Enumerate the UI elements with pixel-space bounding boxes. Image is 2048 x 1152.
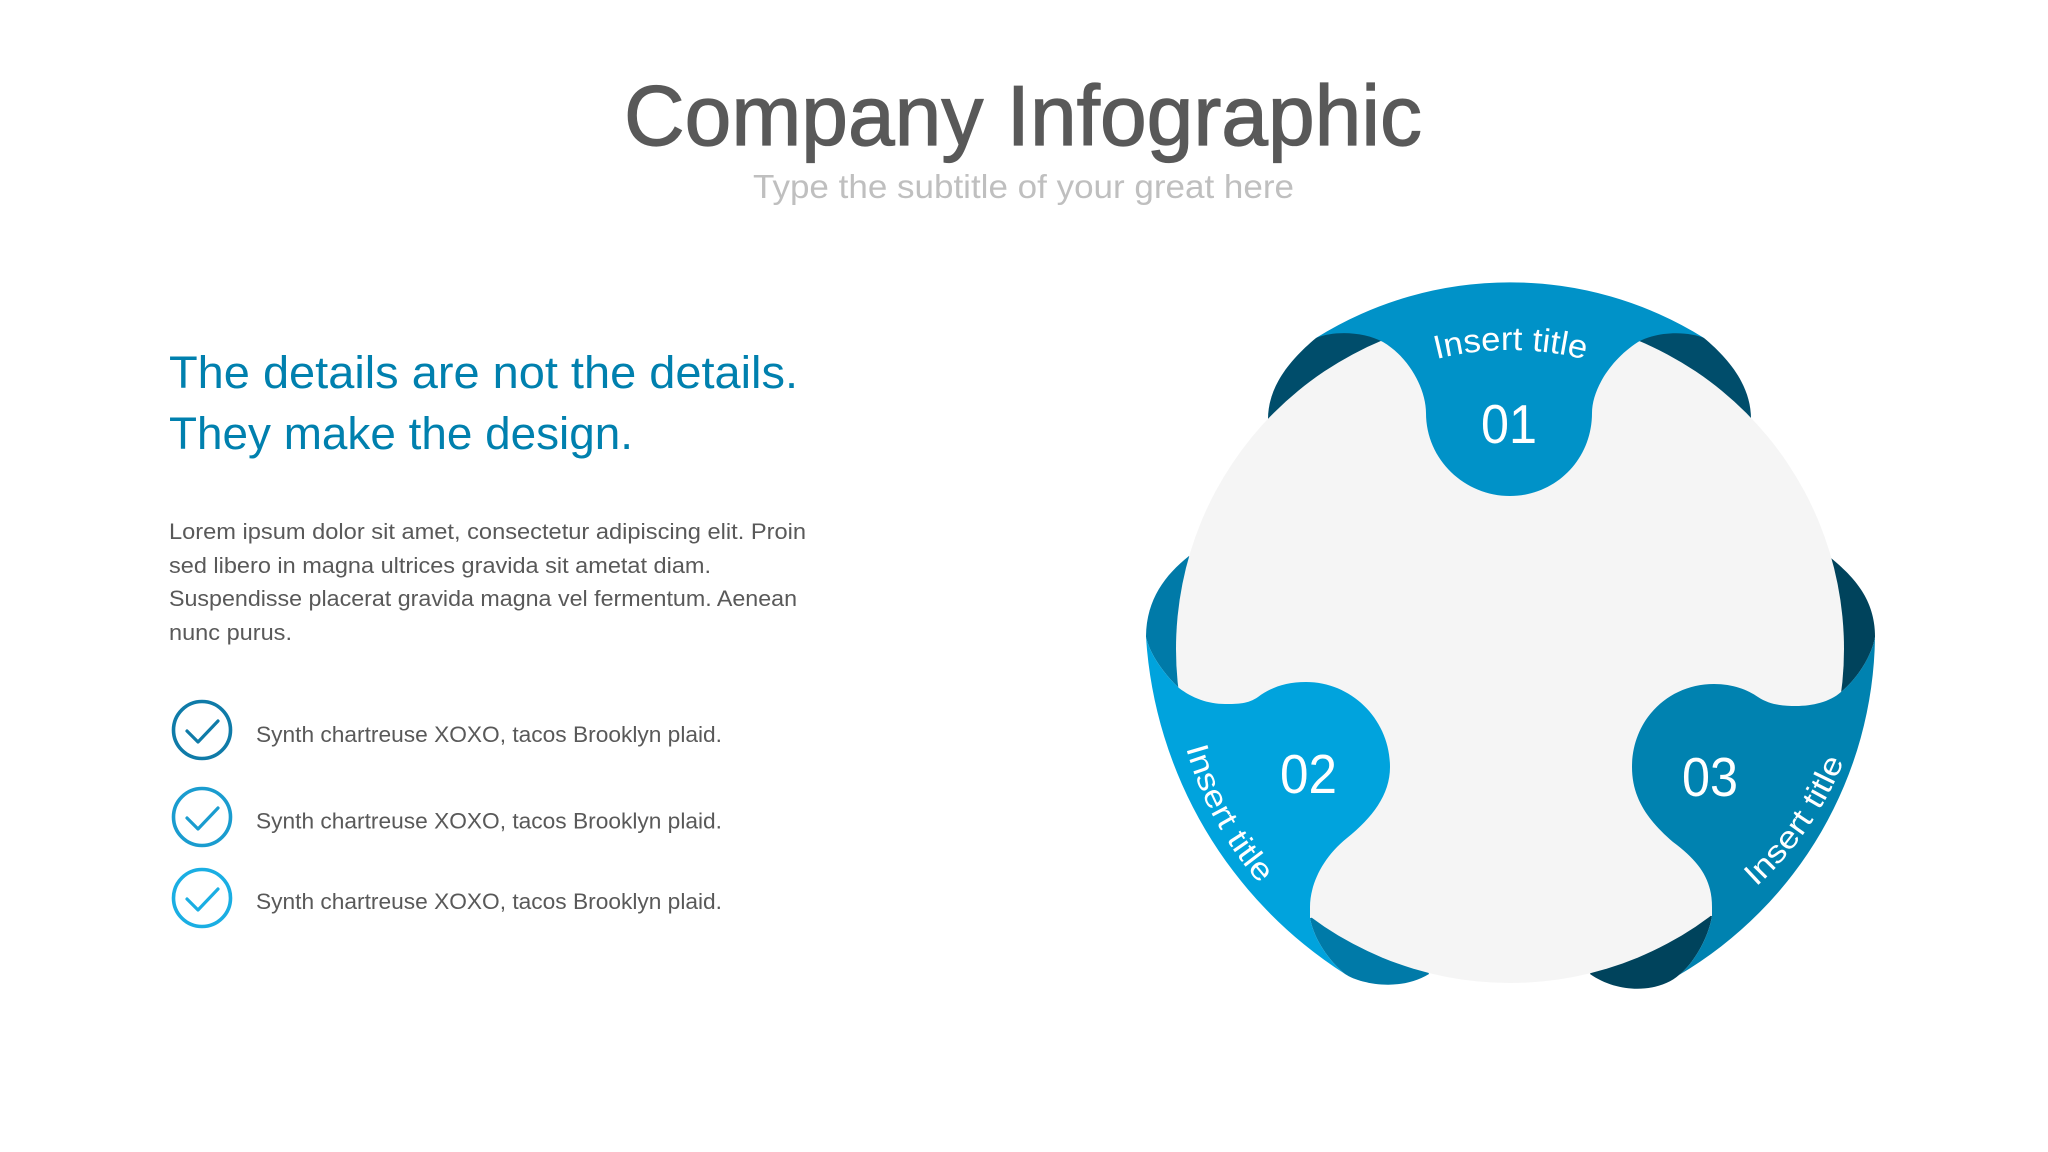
segment 01: [1316, 282, 1704, 496]
heading: [169, 347, 798, 459]
segment 02: 02: [1280, 743, 1337, 805]
segment 03: Insert title: [1744, 758, 1842, 885]
segment 02: Insert title: [1187, 745, 1269, 880]
check item 2: [174, 788, 722, 846]
check item 2: Synth chartreuse XOXO, tacos Brooklyn plaid.: [256, 808, 722, 834]
body text: Lorem ipsum dolor sit amet, consectetur adipiscing elit. Proin: [169, 519, 806, 544]
body text: Suspendisse placerat gravida magna vel fermentum. Aenean: [169, 586, 797, 611]
body text: nunc purus.: [169, 620, 292, 645]
fold shadows: [1146, 320, 1875, 989]
segment 03: 03: [1682, 746, 1738, 808]
subtitle: Type the subtitle of your great here: [753, 168, 1294, 205]
body text: sed libero in magna ultrices gravida sit ametat diam.: [169, 553, 711, 578]
title: Company Infographic: [624, 69, 1422, 164]
check item 3: Synth chartreuse XOXO, tacos Brooklyn plaid.: [256, 889, 722, 914]
circular diagram: [1146, 282, 1875, 989]
body text: [169, 519, 806, 645]
checklist: [174, 702, 722, 926]
heading: They make the design.: [169, 408, 633, 459]
segment 01: Insert title: [1434, 328, 1586, 358]
heading: The details are not the details.: [169, 347, 798, 398]
central circle: [1176, 315, 1844, 983]
check item 1: Synth chartreuse XOXO, tacos Brooklyn plaid.: [256, 722, 722, 747]
segment 02: [1146, 638, 1390, 974]
check item 3: [174, 870, 722, 926]
segment 01: 01: [1481, 393, 1537, 455]
check item 1: [174, 702, 722, 758]
segment 03: [1632, 638, 1875, 975]
